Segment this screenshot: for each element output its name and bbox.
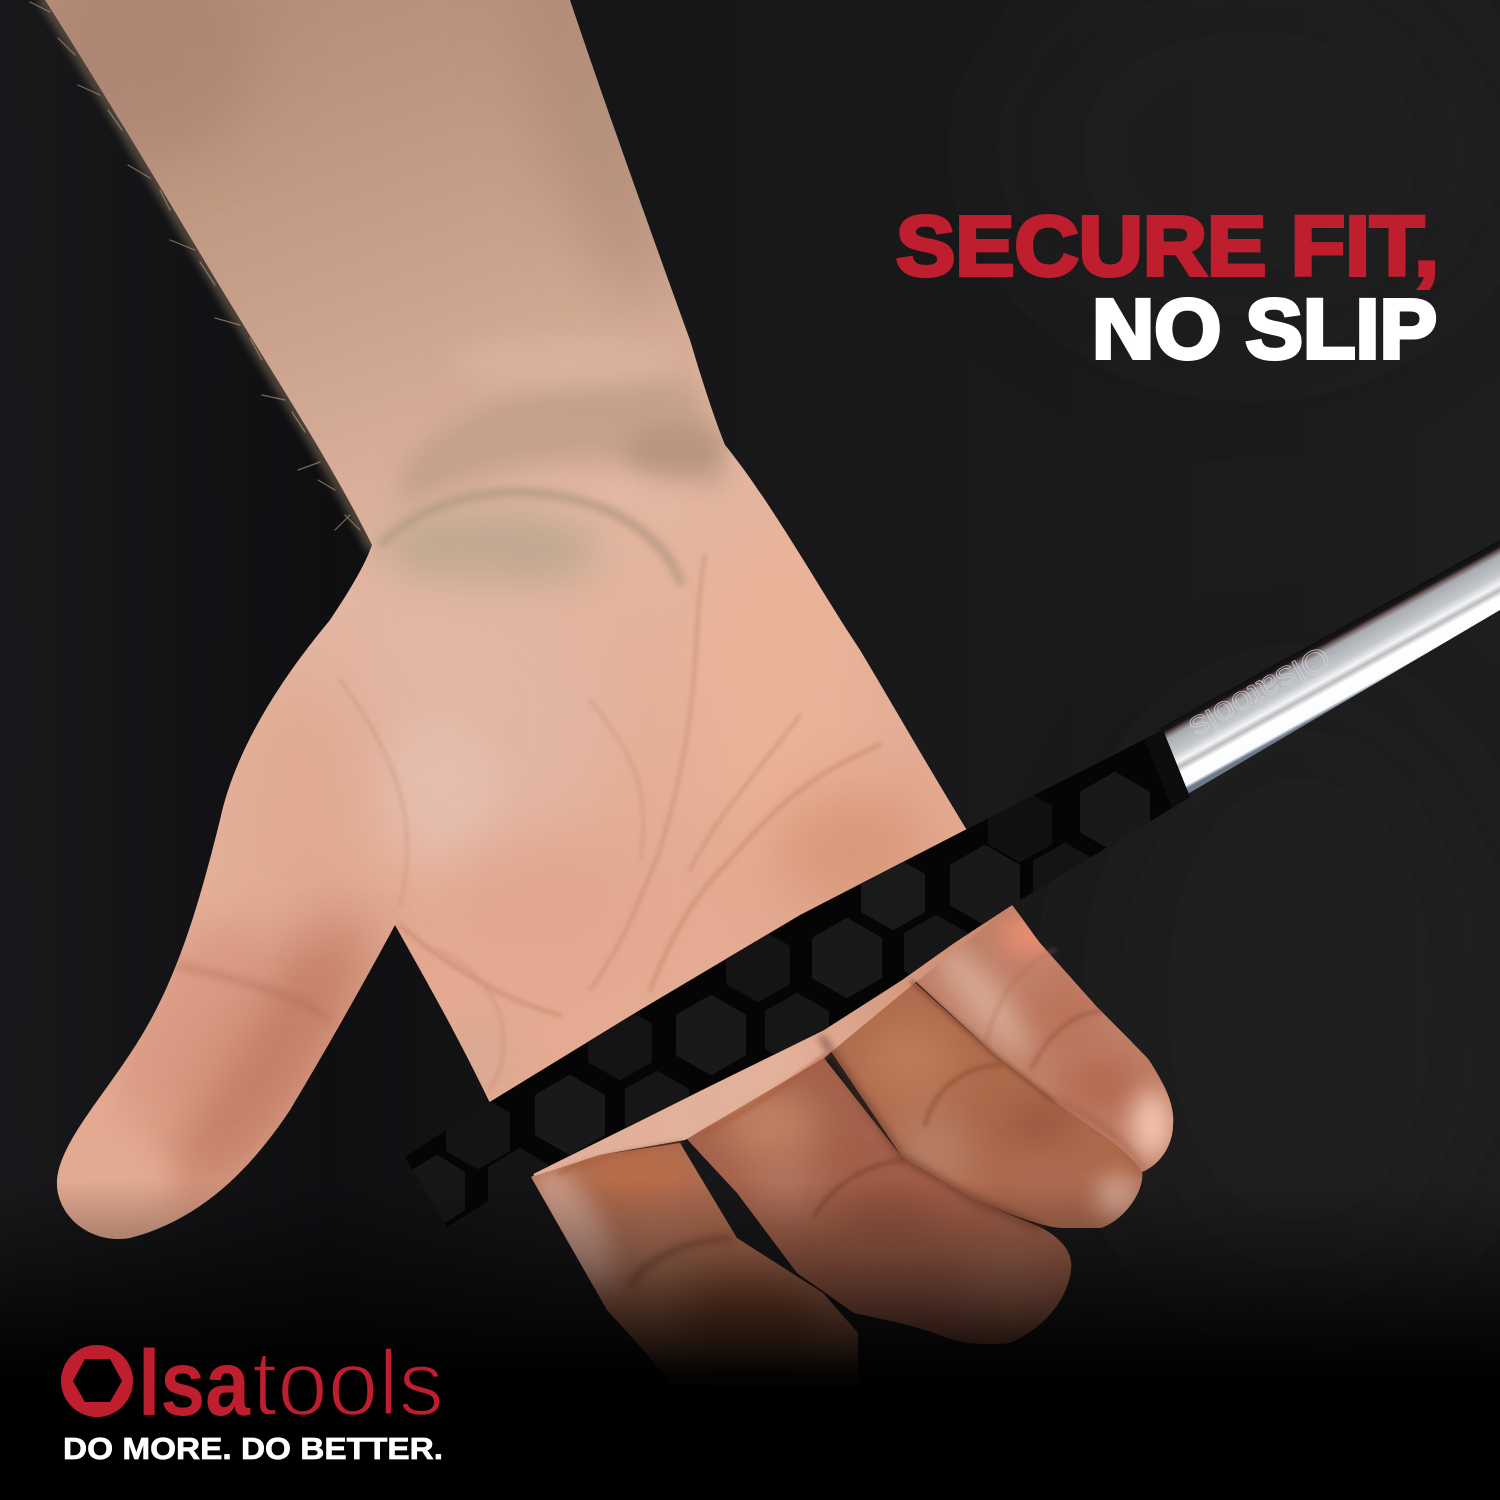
engraved brand on tube: Olsatools bbox=[1184, 639, 1337, 747]
finger: ring finger bbox=[832, 982, 1142, 1228]
hand: forearm, palm and thumb bbox=[40, 0, 1012, 1239]
logo mark: hexagon O: O bbox=[62, 1329, 133, 1436]
skin shading bbox=[40, 0, 930, 1233]
brand logo bbox=[61, 1329, 444, 1466]
finger: little finger bbox=[916, 905, 1174, 1172]
bottom dark fade bbox=[0, 1180, 1500, 1405]
finger: index finger bbox=[531, 1143, 858, 1369]
arm hair fringe bbox=[30, 0, 372, 545]
steel tube bbox=[1160, 540, 1500, 795]
thenar arc shadow bbox=[380, 492, 682, 585]
palm creases bbox=[340, 555, 880, 1090]
fingers bbox=[531, 905, 1174, 1369]
grip sleeve with hexagon pattern bbox=[405, 730, 1190, 1227]
headline line two: NO SLIP bbox=[1092, 282, 1437, 376]
tagline: DO MORE. DO BETTER. bbox=[63, 1431, 443, 1466]
logo wordmark light part: tools bbox=[252, 1331, 444, 1435]
wrist band bbox=[400, 378, 725, 510]
headline line one: SECURE FIT, bbox=[896, 199, 1439, 293]
finger creases and separators bbox=[560, 950, 1142, 1285]
light strip below the grip bbox=[531, 905, 1012, 1177]
headline bbox=[896, 199, 1439, 376]
finger: middle finger bbox=[686, 1058, 1072, 1344]
logo wordmark bold part: lsa bbox=[138, 1331, 251, 1435]
